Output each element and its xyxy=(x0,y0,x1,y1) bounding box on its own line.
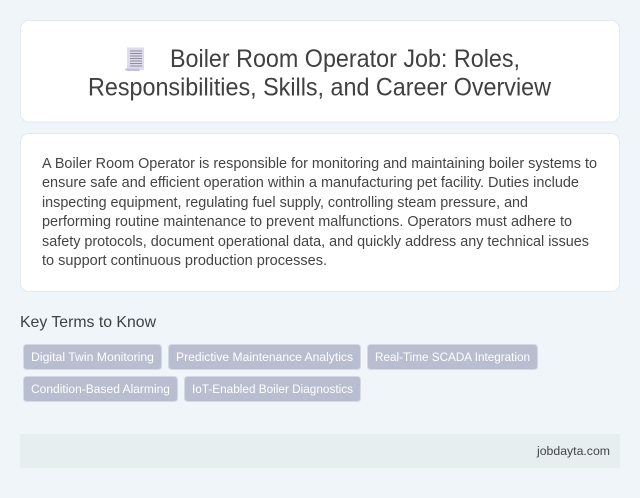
heading: key terms: Key Terms to Know xyxy=(20,314,156,331)
tag: scada: Real-Time SCADA Integration xyxy=(375,350,530,364)
description text: inspecting equipment, regulating fuel supply, controlling steam pressure, and xyxy=(42,195,528,211)
icon: document scroll xyxy=(125,48,144,71)
tag: digital twin xyxy=(24,344,162,370)
title: Responsibilities, Skills, and Career Overview xyxy=(88,74,552,102)
description text: ensure safe and efficient operation within a manufacturing pet facility. Duties include xyxy=(42,175,579,191)
tag: condition alarming: Condition-Based Alarming xyxy=(31,382,170,396)
description text xyxy=(42,156,597,269)
title: Boiler Room Operator Job: Roles, xyxy=(170,45,520,73)
description text: safety protocols, document operational data, and quickly address any technical issues xyxy=(42,234,589,250)
tags xyxy=(24,344,538,402)
title xyxy=(88,45,552,102)
footer xyxy=(20,434,620,468)
description text: A Boiler Room Operator is responsible for monitoring and maintaining boiler systems to xyxy=(42,156,597,172)
description text: performing routine maintenance to prevent malfunctions. Operators must adhere to xyxy=(42,214,572,230)
tag: iot: IoT-Enabled Boiler Diagnostics xyxy=(192,382,353,396)
panel: title card xyxy=(20,20,620,122)
tag: condition alarming xyxy=(24,376,178,402)
tag: predictive maintenance xyxy=(168,344,360,370)
panel: description xyxy=(20,134,620,292)
tag: digital twin: Digital Twin Monitoring xyxy=(31,350,154,364)
tag: iot xyxy=(184,376,360,402)
footer: jobdayta.com xyxy=(536,444,610,458)
tag: scada xyxy=(368,344,538,370)
tag: predictive maintenance: Predictive Maintenance Analytics xyxy=(176,350,353,364)
description text: to support continuous production processes. xyxy=(42,253,327,269)
